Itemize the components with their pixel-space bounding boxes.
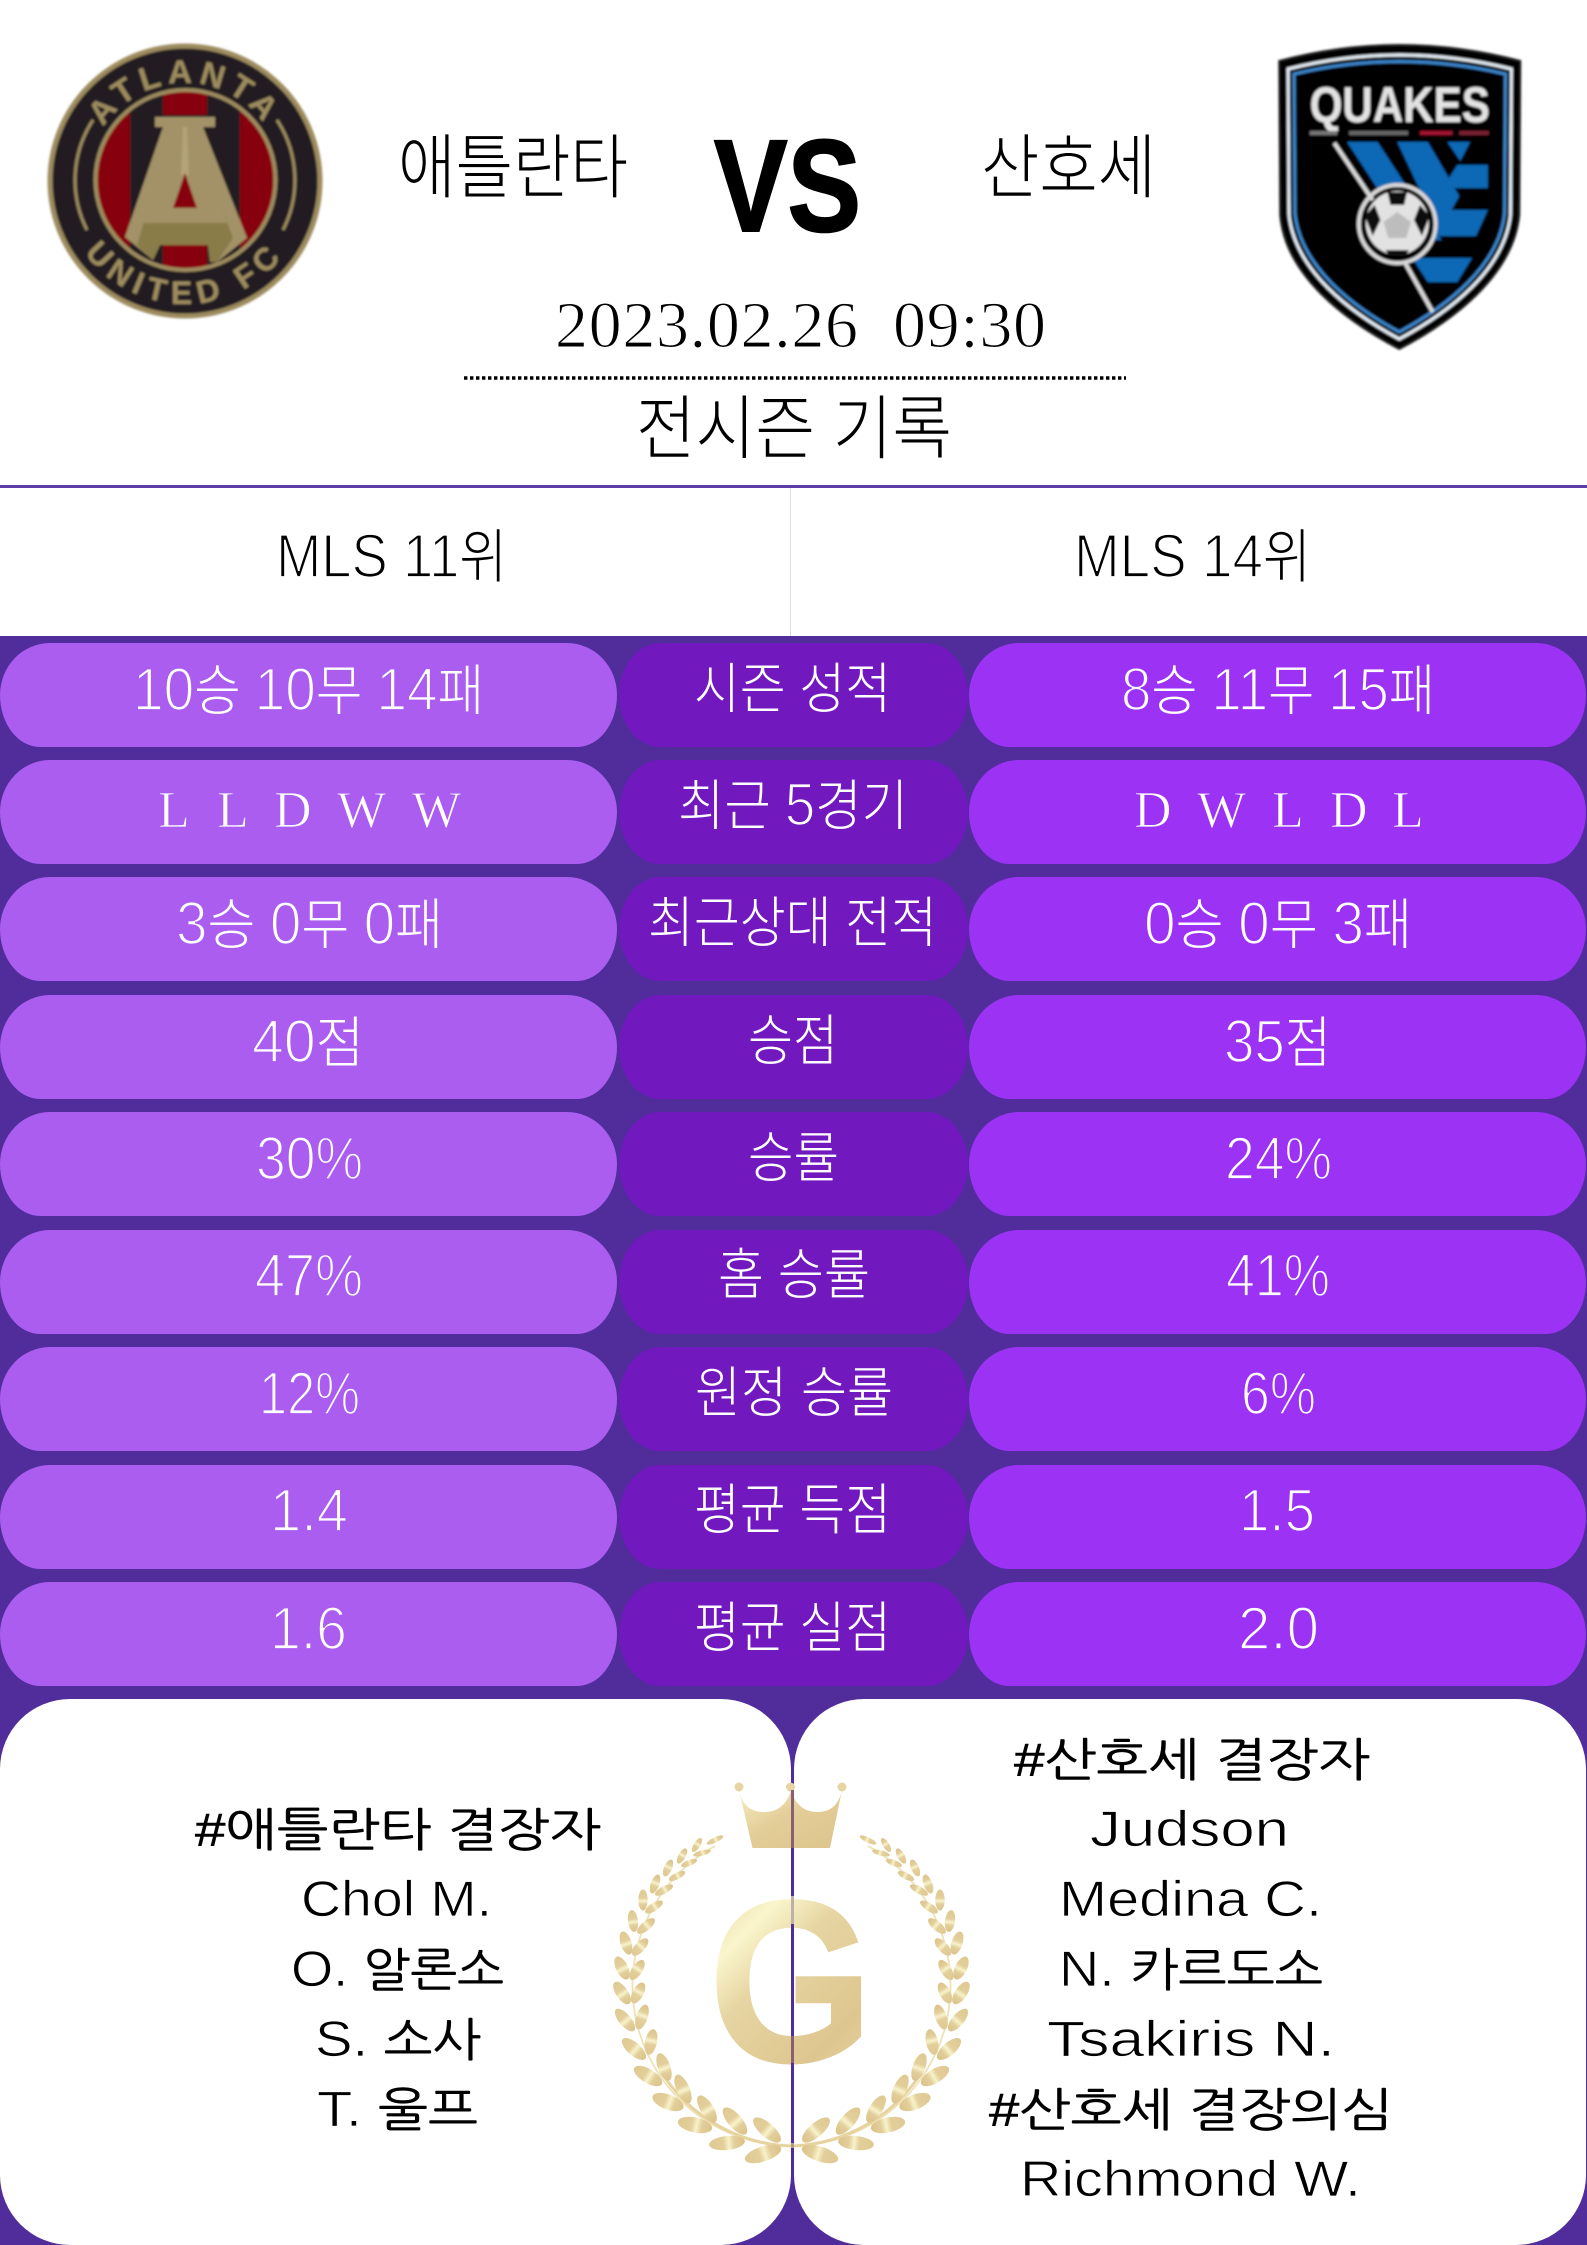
logo: San Jose Earthquakes <box>1279 45 1520 349</box>
row: average goals against <box>0 1582 1586 1686</box>
row: average goals for <box>0 1465 1586 1569</box>
row: average goals for: 1.4 <box>270 1477 348 1544</box>
panel: Atlanta absences: Chol M. <box>301 1871 492 1927</box>
row: home win rate <box>0 1230 1586 1334</box>
crown <box>734 1782 846 1848</box>
San Jose league rank: MLS 14위 <box>1074 522 1311 590</box>
laurel wreath <box>610 1834 973 2167</box>
row: home win rate: 홈 승률 <box>718 1244 870 1306</box>
row: average goals against: 1.6 <box>270 1595 347 1662</box>
row: away win rate: 6% <box>1241 1360 1316 1427</box>
row: last 5 games: D W L D L <box>1134 782 1424 839</box>
panel: San Jose absences: N. 카르도소 <box>1059 1941 1323 1997</box>
panel: San Jose absences: #산호세 결장자 <box>1014 1734 1370 1786</box>
row: home win rate: 41% <box>1226 1242 1330 1309</box>
row: season record: 시즌 성적 <box>694 658 891 720</box>
row: points: 40점 <box>252 1008 364 1075</box>
Atlanta league rank: MLS 11위 <box>276 522 507 590</box>
row: points: 35점 <box>1224 1008 1331 1075</box>
row: head to head: 3승 0무 0패 <box>176 890 443 957</box>
panel: league rank <box>0 485 1587 636</box>
logo: gold G crown and wreath <box>610 1782 973 2167</box>
row: season record <box>0 643 1586 747</box>
team name: Atlanta: 애틀란타 <box>398 129 628 207</box>
stats background <box>0 636 1587 2245</box>
panel: Atlanta absences: #애틀란타 결장자 <box>195 1804 601 1856</box>
row: head to head <box>0 877 1586 981</box>
logo: Atlanta United FC: UNITED FC <box>86 238 279 306</box>
panel: San Jose absences: Medina C. <box>1059 1871 1322 1927</box>
center divider through logo <box>791 1790 794 2148</box>
row: average goals for: 평균 득점 <box>694 1479 891 1541</box>
dotted divider <box>464 376 1126 380</box>
row: last 5 games <box>0 760 1586 864</box>
VS heading: VS <box>714 112 861 259</box>
logo: San Jose Earthquakes: QUAKES <box>1310 77 1490 133</box>
row: win rate <box>0 1112 1586 1216</box>
panel: San Jose absences: #산호세 결장의심 <box>989 2084 1393 2136</box>
letter G: G <box>709 1853 873 2110</box>
row: win rate: 30% <box>256 1125 363 1192</box>
logo: Atlanta United FC: ATLANTA <box>90 58 276 128</box>
row: last 5 games: L L D W W <box>158 782 461 839</box>
row: average goals for: 1.5 <box>1239 1477 1315 1544</box>
panel: San Jose absences: Richmond W. <box>1020 2151 1361 2207</box>
panel: Atlanta absences: T. 울프 <box>317 2081 478 2137</box>
row: season record: 8승 11무 15패 <box>1121 656 1435 723</box>
match date and time: 2023.02.26 09:30 <box>555 289 1046 362</box>
row: season record: 10승 10무 14패 <box>133 656 484 723</box>
row: away win rate: 12% <box>259 1360 360 1427</box>
row: points: 승점 <box>748 1010 838 1072</box>
row: away win rate: 원정 승률 <box>695 1362 893 1424</box>
row: head to head: 최근상대 전적 <box>648 892 937 954</box>
row: average goals against: 평균 실점 <box>694 1597 891 1659</box>
row: home win rate: 47% <box>255 1242 363 1309</box>
row: away win rate <box>0 1347 1586 1451</box>
panel: San Jose absences: Judson <box>1090 1801 1289 1857</box>
panel: Atlanta absences <box>0 1699 791 2245</box>
team name: San Jose: 산호세 <box>981 129 1156 207</box>
row: average goals against: 2.0 <box>1238 1595 1319 1662</box>
row: last 5 games: 최근 5경기 <box>678 771 908 838</box>
section heading: last season record: 전시즌 기록 <box>636 390 952 468</box>
panel: Atlanta absences: O. 알론소 <box>291 1941 504 1997</box>
panel: Atlanta absences: S. 소사 <box>315 2011 481 2067</box>
logo: Atlanta United FC <box>46 42 324 320</box>
row: win rate: 24% <box>1225 1125 1332 1192</box>
row: points <box>0 995 1586 1099</box>
panel: San Jose absences <box>794 1699 1586 2245</box>
panel: San Jose absences: Tsakiris N. <box>1047 2011 1335 2067</box>
row: head to head: 0승 0무 3패 <box>1144 890 1412 957</box>
row: win rate: 승률 <box>748 1127 839 1189</box>
